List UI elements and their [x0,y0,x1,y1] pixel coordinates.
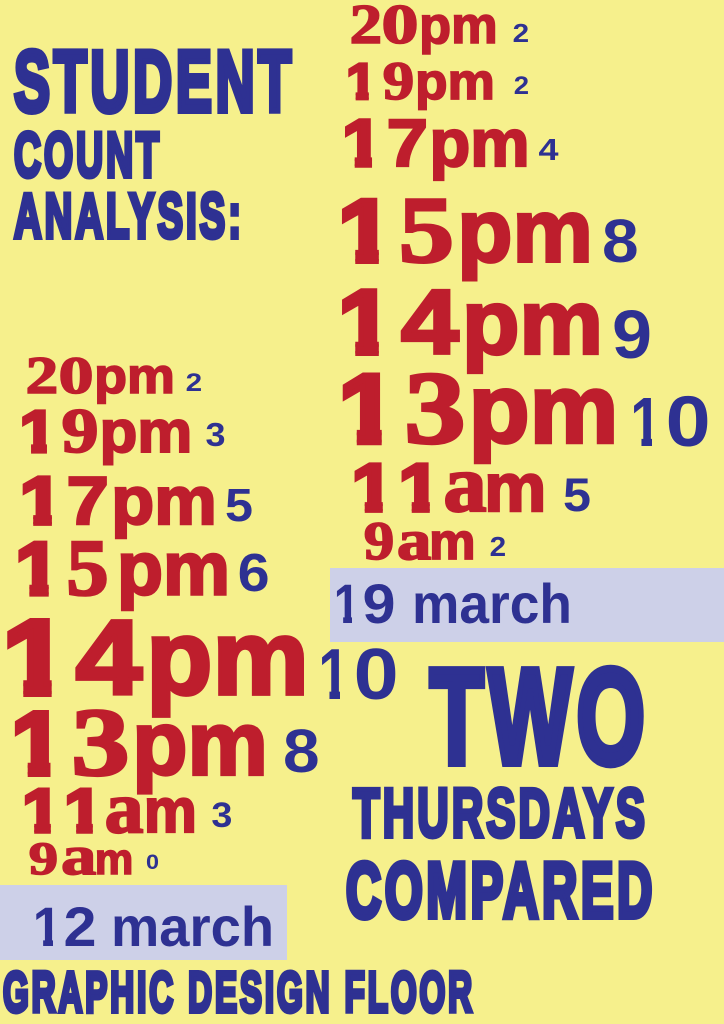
row: 14pm count 10: 1 [318,635,349,715]
title line: count: COUNT [14,120,162,190]
row: 20pm count 2: 2 [26,347,58,405]
row: 19pm count 2 [348,62,528,110]
row: 13pm count 10: 0 [666,383,711,462]
row: 15pm count 8: pm [457,180,593,280]
row: 9am count 2: 2 [490,531,506,562]
row: 9am count 0: a [61,825,96,886]
row: 15pm count 6: 6 [238,543,270,603]
row: 13pm count 8: pm [132,694,268,794]
row: 13pm count 8: 3 [72,688,129,795]
row: 14pm count 10: 0 [354,635,399,715]
row: 9am count 2: m [429,513,476,570]
row: 17pm count 5: 1 [20,463,63,539]
row: 17pm count 4: 7 [387,106,428,181]
row: 11am count 3 [24,788,231,834]
row: 15pm count 6: pm [117,527,230,611]
row: 11am count 3: 3 [211,796,232,835]
row: 9am count 0: 9 [29,833,58,885]
row: 15pm count 8: 8 [602,207,639,275]
row: 19pm count 3 [22,408,224,466]
row: 11am count 3: 1 [22,777,61,846]
row: 19pm count 2: pm [415,53,495,110]
row: 13pm count 10: 1 [630,383,661,461]
row: 17pm count 5 [22,475,252,540]
row: 14pm count 9: 9 [612,296,652,373]
row: 9am count 2 [364,509,506,572]
date band: 19 march: 1 [334,572,360,635]
heading: two thursdays compared [346,641,656,934]
date band: 12 march [0,885,287,960]
row: 13pm count 8: 1 [11,694,64,794]
row: 19pm count 3: 9 [62,396,98,466]
row: 14pm count 9 [342,288,650,374]
row: 20pm count 2: 2 [513,18,529,48]
row: 14pm count 10: 1 [2,599,68,717]
row: 19pm count 3: 3 [206,416,226,453]
panel: 12 march counts by hour [2,347,399,886]
row: 11am count 5: 1 [352,450,394,526]
row: 17pm count 4: pm [430,106,530,181]
row: 13pm count 8 [14,709,318,795]
title line: student: STUDENT [14,34,295,130]
row: 17pm count 5: pm [111,463,217,539]
row: 14pm count 9: 4 [401,272,459,373]
row: 19pm count 2: 9 [383,51,414,111]
title line: analysis: ANALYSIS: [14,182,244,252]
date band: 19 march: march [412,572,572,635]
row: 14pm count 9: pm [462,272,603,373]
row: 15pm count 6 [18,540,268,612]
row: 15pm count 8: 1 [338,180,393,280]
row: 11am count 5: 5 [563,468,591,521]
row: 15pm count 6: 5 [66,525,108,613]
row: 11am count 3: 1 [64,777,103,846]
row: 15pm count 8 [342,198,637,282]
row: 20pm count 2 [350,0,529,56]
row: 17pm count 5: 5 [225,479,253,531]
date band: 12 march: 1 [33,895,62,958]
row: 20pm count 2: 0 [59,347,94,405]
row: 20pm count 2 [26,347,202,405]
row: 15pm count 6: 1 [15,527,60,611]
row: 13pm count 10: pm [469,354,618,463]
row: 14pm count 10: 4 [76,599,142,717]
row: 15pm count 8: 5 [399,178,454,282]
row: 14pm count 9: 1 [338,272,393,373]
row: 19pm count 3: pm [100,399,192,465]
row: 17pm count 4: 1 [342,106,382,181]
row: 19pm count 3: 1 [19,399,56,465]
row: 17pm count 5: 7 [66,463,109,539]
row: 17pm count 4 [345,118,558,182]
row: 9am count 2: 9 [364,511,394,571]
row: 20pm count 2: 2 [186,369,202,397]
row: 9am count 0 [29,825,159,886]
row: 14pm count 10: pm [146,599,309,717]
panel: 19 march counts by hour [338,0,711,572]
row: 9am count 0: m [95,835,133,884]
date band: 19 march: 9 [362,572,396,635]
row: 11am count 5: m [484,450,546,526]
date band: 12 march: 2 [64,895,96,958]
date band: 19 march [330,568,724,642]
row: 9am count 2: a [397,509,431,572]
row: 11am count 3: a [105,767,144,848]
row: 11am count 5: 1 [398,450,440,526]
row: 11am count 3: m [144,777,197,846]
row: 19pm count 2: 2 [514,72,529,100]
title: student count analysis [14,34,295,252]
row: 19pm count 2: 1 [346,53,377,110]
row: 13pm count 10: 1 [338,354,396,463]
date band: 12 march: march [111,895,274,958]
row: 13pm count 10 [342,372,708,464]
row: 20pm count 2: pm [94,348,175,404]
row: 14pm count 10 [7,618,396,718]
row: 11am count 5 [354,462,590,513]
row: 11am count 5: a [444,441,486,529]
row: 17pm count 4: 4 [538,133,559,167]
row: 13pm count 8: 8 [283,717,320,785]
row: 9am count 0: 0 [146,851,159,874]
row: 13pm count 10: 3 [405,351,465,465]
